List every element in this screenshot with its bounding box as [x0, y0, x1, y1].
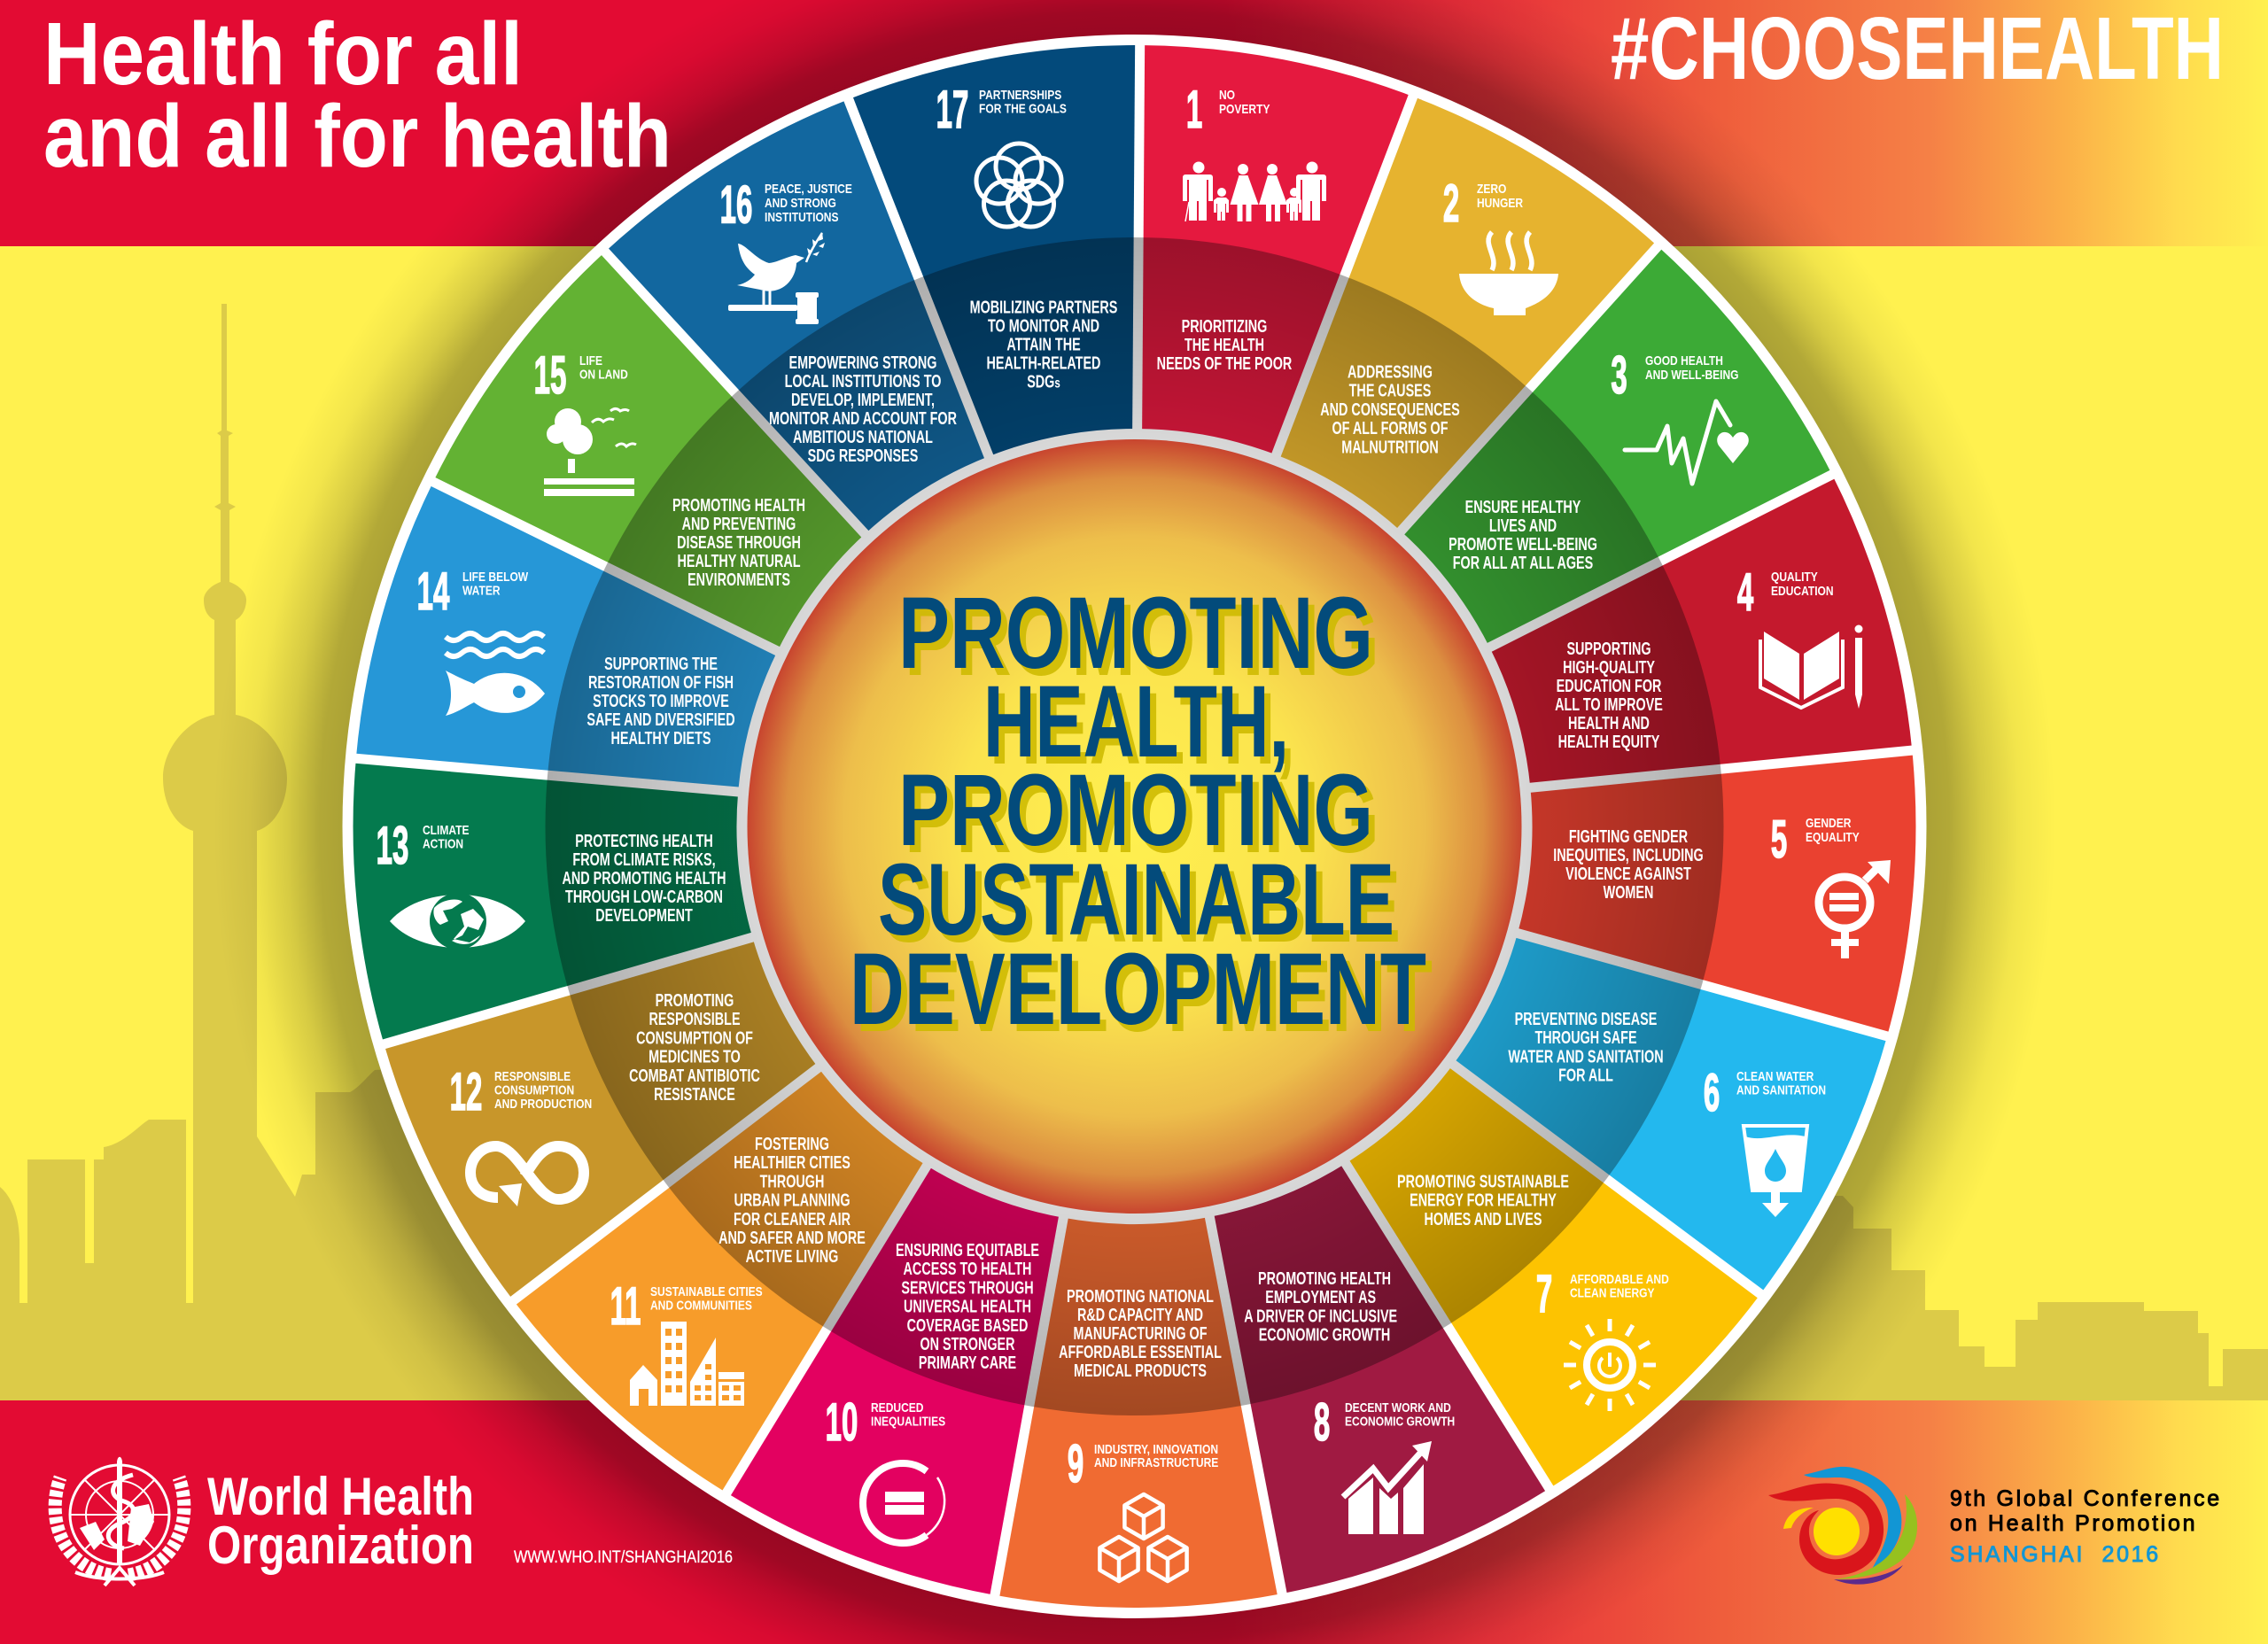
- wedge 4 quality education: [1465, 475, 1959, 911]
- wheel wedges: [306, 0, 1959, 1644]
- central title: PROMOTING: [898, 754, 1373, 867]
- icon: bowl: [1459, 232, 1558, 315]
- title zero hunger: ZERO: [1477, 182, 1506, 196]
- conference title: on Health Promotion: [1950, 1511, 2197, 1536]
- World Health Organization wordmark: [207, 1467, 474, 1575]
- wedge 10 reduced inequalities: [717, 1141, 1068, 1595]
- title partnerships: FOR THE GOALS: [979, 101, 1067, 116]
- panel: SDG 17: [936, 81, 1117, 392]
- band text 12: MEDICINES TO: [649, 1046, 741, 1066]
- band text 16: EMPOWERING STRONG: [788, 353, 937, 373]
- panel: SDG 6: [1508, 1009, 1826, 1217]
- panel: SDG 2: [1320, 174, 1558, 457]
- number 14: 14: [417, 562, 449, 622]
- band text 14: RESTORATION OF FISH: [588, 672, 734, 693]
- panel: SDG 5: [1553, 810, 1891, 958]
- title peace justice: PEACE, JUSTICE: [765, 182, 852, 196]
- title climate action: CLIMATE: [423, 823, 470, 837]
- title climate action: ACTION: [423, 836, 463, 851]
- band text 3: FOR ALL AT ALL AGES: [1453, 553, 1593, 573]
- heading: Health for all and all for health: Health for all: [43, 4, 523, 104]
- title life below water: WATER: [462, 583, 501, 598]
- title industry: AND INFRASTRUCTURE: [1094, 1455, 1218, 1470]
- number 6: 6: [1704, 1064, 1720, 1123]
- title quality education: QUALITY: [1771, 570, 1818, 584]
- title no poverty: POVERTY: [1219, 102, 1270, 116]
- number 11: 11: [610, 1277, 641, 1337]
- icon: circled equals: [863, 1463, 944, 1543]
- band text 9: R&D CAPACITY AND: [1077, 1305, 1203, 1325]
- title decent work: DECENT WORK AND: [1345, 1400, 1451, 1415]
- icon: five rings: [976, 143, 1061, 227]
- wedge 3 good health: [1383, 246, 1868, 740]
- title clean water: AND SANITATION: [1736, 1082, 1826, 1097]
- title life on land: ON LAND: [579, 367, 628, 382]
- panel: SDG 12: [450, 990, 760, 1206]
- band text 10: ACCESS TO HEALTH: [904, 1259, 1031, 1279]
- panel: SDG 3: [1449, 346, 1749, 573]
- central sun disc: [748, 439, 1522, 1214]
- band text 10: SERVICES THROUGH: [901, 1277, 1034, 1298]
- central title: HEALTH,: [983, 665, 1289, 779]
- number 2: 2: [1443, 174, 1459, 234]
- band text 11: URBAN PLANNING: [734, 1190, 850, 1210]
- skyline silhouette: right: [1506, 1187, 2268, 1400]
- title sustainable cities: AND COMMUNITIES: [650, 1298, 752, 1313]
- band text 3: ENSURE HEALTHY: [1465, 497, 1581, 517]
- dark translucent inner band: [546, 237, 1724, 1415]
- band text 13: FROM CLIMATE RISKS,: [572, 849, 716, 870]
- band text 16: LOCAL INSTITUTIONS TO: [785, 371, 941, 392]
- number 4: 4: [1737, 563, 1753, 623]
- number 1: 1: [1186, 81, 1202, 140]
- band text 1: THE HEALTH: [1184, 335, 1264, 355]
- band text 7: PROMOTING SUSTAINABLE: [1397, 1171, 1569, 1191]
- wedge 2 zero hunger: [1267, 97, 1677, 580]
- top red gradient band: [0, 0, 2268, 246]
- band text 14: STOCKS TO IMPROVE: [593, 691, 729, 711]
- band text 8: A DRIVER OF INCLUSIVE: [1244, 1306, 1397, 1326]
- band text 10: ON STRONGER: [920, 1334, 1015, 1354]
- number 16: 16: [720, 175, 752, 235]
- band text 5: FIGHTING GENDER: [1569, 826, 1688, 847]
- white wheel disc: [342, 35, 1926, 1618]
- wedge 14 life below water: [356, 477, 789, 795]
- World Health Organization wordmark: World Health: [207, 1467, 474, 1526]
- wedge 12 responsible consumption: [342, 827, 840, 1300]
- icon: heartbeat: [1625, 401, 1749, 484]
- band text 7: HOMES AND LIVES: [1425, 1209, 1542, 1229]
- conference title: 9th Global Conference: [1950, 1486, 2222, 1511]
- wheel base: [306, 0, 1959, 1644]
- panel: SDG 9: [1059, 1286, 1222, 1581]
- icon: water glass: [1744, 1126, 1807, 1217]
- title good health: GOOD HEALTH: [1645, 353, 1723, 368]
- panel: SDG 14: [417, 562, 735, 748]
- wedge 11 sustainable cities: [485, 996, 941, 1493]
- band text 2: ADDRESSING: [1348, 361, 1433, 382]
- band text 11: THROUGH: [760, 1171, 824, 1191]
- icon: growth chart: [1343, 1441, 1432, 1534]
- number 3: 3: [1611, 346, 1627, 406]
- band text 4: HIGH-QUALITY: [1563, 657, 1655, 678]
- central title: [850, 577, 1426, 1046]
- conference title: [1950, 1486, 2222, 1567]
- band text 3: LIVES AND: [1489, 516, 1557, 536]
- band text 5: VIOLENCE AGAINST: [1565, 864, 1691, 884]
- band text 14: SUPPORTING THE: [604, 654, 718, 674]
- panel: SDG 16: [720, 175, 957, 466]
- icon: family: [1183, 161, 1326, 221]
- band text 6: FOR ALL: [1558, 1065, 1613, 1085]
- wedge 16 peace justice: [605, 60, 1091, 554]
- band text 16: MONITOR AND ACCOUNT FOR: [769, 408, 957, 429]
- band text 8: PROMOTING HEALTH: [1258, 1268, 1391, 1289]
- World Health Organization wordmark: Organization: [207, 1516, 474, 1575]
- skyline silhouette: left: [0, 304, 797, 1400]
- wedge 7 clean energy: [1262, 1049, 1760, 1520]
- band text 13: PROTECTING HEALTH: [575, 831, 713, 851]
- wedge 6 clean water: [1416, 926, 1887, 1308]
- band text 2: MALNUTRITION: [1341, 437, 1439, 457]
- title no poverty: NO: [1219, 88, 1235, 102]
- wedge 1 no poverty: [1137, 45, 1422, 458]
- band text 15: DISEASE THROUGH: [677, 532, 801, 553]
- title clean energy: AFFORDABLE AND: [1570, 1272, 1669, 1286]
- band text 15: PROMOTING HEALTH: [672, 495, 805, 516]
- number 9: 9: [1068, 1435, 1084, 1494]
- band text 9: AFFORDABLE ESSENTIAL: [1059, 1342, 1222, 1362]
- title zero hunger: HUNGER: [1477, 196, 1523, 210]
- band text 9: PROMOTING NATIONAL: [1067, 1286, 1214, 1307]
- number 10: 10: [826, 1393, 858, 1453]
- band text 2: THE CAUSES: [1349, 380, 1431, 400]
- band text 11: ACTIVE LIVING: [746, 1246, 838, 1267]
- icon: city: [630, 1322, 744, 1406]
- title decent work: ECONOMIC GROWTH: [1345, 1414, 1455, 1429]
- panel: SDG 4: [1555, 563, 1862, 752]
- icon: sun power: [1564, 1319, 1656, 1411]
- bottom red gradient band: [0, 1400, 2268, 1644]
- band text 16: SDG RESPONSES: [808, 446, 918, 466]
- heading: Health for all and all for health: [43, 4, 672, 186]
- number 15: 15: [534, 346, 566, 406]
- band text 16: DEVELOP, IMPLEMENT,: [791, 390, 935, 410]
- band text 13: DEVELOPMENT: [595, 905, 693, 926]
- icon: cubes: [1099, 1494, 1187, 1581]
- central title: PROMOTING: [898, 577, 1373, 690]
- title quality education: EDUCATION: [1771, 584, 1834, 598]
- icon: book and pencil: [1760, 625, 1862, 709]
- panel: SDG 10: [826, 1240, 1039, 1543]
- icon: eye and globe: [390, 893, 525, 950]
- panel: SDG 13: [377, 817, 726, 950]
- band text 10: PRIMARY CARE: [919, 1353, 1016, 1373]
- title life on land: LIFE: [579, 353, 602, 368]
- band text 16: AMBITIOUS NATIONAL: [793, 427, 933, 447]
- wedge 17 partnerships: [853, 0, 1264, 480]
- band text 5: WOMEN: [1604, 882, 1653, 903]
- number 13: 13: [377, 817, 408, 876]
- title responsible consumption: CONSUMPTION: [494, 1082, 574, 1097]
- band text 12: CONSUMPTION OF: [636, 1028, 753, 1048]
- band text 14: HEALTHY DIETS: [611, 728, 711, 748]
- band text 11: FOSTERING: [755, 1134, 829, 1154]
- title clean water: CLEAN WATER: [1736, 1069, 1814, 1083]
- band text 11: AND SAFER AND MORE: [718, 1228, 866, 1248]
- band text 17: MOBILIZING PARTNERS: [970, 297, 1117, 317]
- icon: gender symbol: [1819, 860, 1891, 958]
- icon: waves and fish: [446, 633, 545, 716]
- title life below water: LIFE BELOW: [462, 570, 529, 584]
- band text 15: ENVIRONMENTS: [687, 570, 790, 590]
- wedge 15 life on land: [433, 229, 926, 663]
- title responsible consumption: RESPONSIBLE: [494, 1069, 571, 1083]
- band text 17: HEALTH-RELATED: [987, 353, 1100, 373]
- band text 13: AND PROMOTING HEALTH: [562, 868, 726, 888]
- panel: SDG 15: [534, 346, 805, 590]
- wedge 8 decent work: [1092, 1141, 1550, 1639]
- panel: SDG 7: [1397, 1171, 1669, 1411]
- conference title: SHANGHAI 2016: [1950, 1542, 2161, 1567]
- title gender equality: GENDER: [1806, 816, 1852, 830]
- number 17: 17: [936, 81, 968, 140]
- title sustainable cities: SUSTAINABLE CITIES: [650, 1284, 763, 1299]
- title clean energy: CLEAN ENERGY: [1570, 1285, 1655, 1300]
- title peace justice: AND STRONG: [765, 196, 836, 210]
- band text 10: UNIVERSAL HEALTH: [904, 1296, 1031, 1316]
- band text 9: MANUFACTURING OF: [1073, 1323, 1208, 1344]
- band text 14: SAFE AND DIVERSIFIED: [586, 710, 735, 730]
- band text 6: PREVENTING DISEASE: [1515, 1009, 1657, 1029]
- title partnerships: PARTNERSHIPS: [979, 88, 1061, 102]
- band text 11: HEALTHIER CITIES: [734, 1152, 850, 1173]
- band text 17: TO MONITOR AND: [988, 315, 1099, 336]
- wedge 13 climate action: [306, 659, 778, 1044]
- band text 15: AND PREVENTING: [682, 514, 796, 534]
- band text 1: NEEDS OF THE POOR: [1157, 353, 1293, 374]
- band text 4: SUPPORTING: [1566, 639, 1651, 659]
- heading: Health for all and all for health: and all for health: [43, 87, 672, 186]
- band text 8: EMPLOYMENT AS: [1265, 1287, 1376, 1307]
- band text 10: ENSURING EQUITABLE: [896, 1240, 1039, 1260]
- band text 4: ALL TO IMPROVE: [1555, 694, 1663, 715]
- number 5: 5: [1771, 810, 1787, 870]
- band text 9: MEDICAL PRODUCTS: [1074, 1361, 1207, 1381]
- band text 3: PROMOTE WELL-BEING: [1449, 534, 1597, 554]
- band text 17: SDGs: [1027, 371, 1060, 392]
- title responsible consumption: AND PRODUCTION: [494, 1097, 592, 1111]
- icon: tree and birds: [544, 408, 636, 496]
- wedge 9 industry: [928, 1190, 1282, 1644]
- icon: dove and gavel: [728, 232, 825, 324]
- band text 17: ATTAIN THE: [1006, 334, 1081, 354]
- number 12: 12: [450, 1063, 482, 1122]
- band text 13: THROUGH LOW-CARBON: [565, 887, 723, 907]
- wedge 5 gender equality: [1503, 750, 1939, 1071]
- WHO emblem: [55, 1457, 184, 1586]
- band text 12: COMBAT ANTIBIOTIC: [629, 1065, 760, 1085]
- band text 6: THROUGH SAFE: [1534, 1028, 1637, 1048]
- band text 6: WATER AND SANITATION: [1508, 1046, 1664, 1066]
- central title: SUSTAINABLE: [878, 843, 1394, 957]
- band text 7: ENERGY FOR HEALTHY: [1410, 1190, 1557, 1210]
- band text 15: HEALTHY NATURAL: [677, 551, 801, 571]
- title peace justice: INSTITUTIONS: [765, 210, 839, 224]
- band text 12: RESISTANCE: [654, 1084, 735, 1105]
- band text 8: ECONOMIC GROWTH: [1259, 1324, 1390, 1345]
- band text 4: EDUCATION FOR: [1557, 676, 1662, 696]
- central title: DEVELOPMENT: [850, 933, 1426, 1046]
- number 7: 7: [1536, 1265, 1552, 1324]
- band text 12: PROMOTING: [656, 990, 734, 1011]
- band text 1: PRIORITIZING: [1182, 316, 1267, 337]
- title industry: INDUSTRY, INNOVATION: [1094, 1442, 1218, 1456]
- icon: infinity loop: [470, 1146, 584, 1206]
- panel: SDG 1: [1157, 81, 1326, 374]
- band text 4: HEALTH AND: [1568, 713, 1650, 733]
- panel: SDG 8: [1244, 1268, 1455, 1534]
- panel: SDG 11: [610, 1134, 866, 1406]
- number 8: 8: [1314, 1393, 1330, 1453]
- band text 10: COVERAGE BASED: [907, 1314, 1028, 1335]
- band text 5: INEQUITIES, INCLUDING: [1553, 845, 1704, 865]
- title good health: AND WELL-BEING: [1645, 368, 1739, 382]
- title gender equality: EQUALITY: [1806, 830, 1860, 844]
- band text 4: HEALTH EQUITY: [1558, 732, 1660, 752]
- title reduced inequalities: REDUCED: [871, 1400, 924, 1415]
- band text 11: FOR CLEANER AIR: [734, 1208, 850, 1229]
- conference logo: [1768, 1467, 1917, 1585]
- title reduced inequalities: INEQUALITIES: [871, 1414, 945, 1429]
- band text 2: AND CONSEQUENCES: [1320, 399, 1460, 419]
- website url: WWW.WHO.INT/SHANGHAI2016: [514, 1548, 733, 1567]
- band text 2: OF ALL FORMS OF: [1332, 418, 1449, 438]
- band text 12: RESPONSIBLE: [649, 1009, 741, 1029]
